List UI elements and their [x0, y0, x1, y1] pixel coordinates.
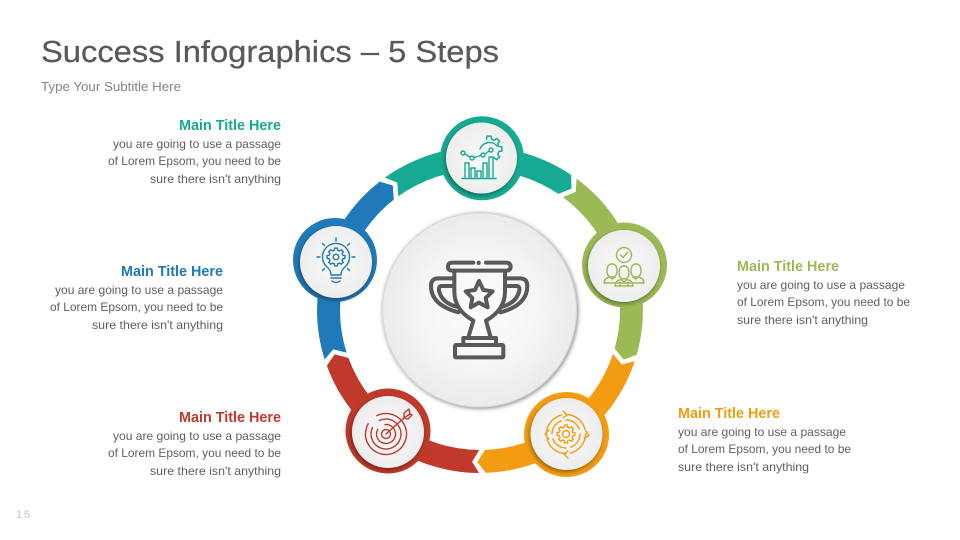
- text block: teal: sure there isn't anything: [150, 172, 281, 186]
- text block: orange: of Lorem Epsom, you need to be: [678, 442, 851, 456]
- icon: gear with circular arrows: [545, 411, 589, 458]
- text block: teal: Main Title Here: [179, 117, 281, 134]
- text block: orange: sure there isn't anything: [678, 460, 809, 474]
- arrow segment: red: [310, 348, 490, 498]
- text block: blue: Main Title Here: [121, 263, 223, 280]
- icon: trophy: [431, 263, 527, 357]
- node: orange: [524, 392, 609, 477]
- title: Success Infographics – 5 Steps: [41, 34, 499, 69]
- arrow segment: orange: [473, 346, 653, 496]
- ring of five arrow segments: [296, 147, 663, 498]
- node: red: [346, 388, 430, 474]
- text block: red: sure there isn't anything: [150, 464, 281, 478]
- icon: light bulb with gear: [317, 238, 355, 282]
- text block: green: Main Title Here: [737, 258, 839, 275]
- text block: teal: [108, 117, 281, 186]
- text block: green: of Lorem Epsom, you need to be: [737, 295, 910, 309]
- text block: orange: [678, 405, 851, 474]
- text block: red: [108, 409, 281, 478]
- icon: team with check mark: [604, 248, 644, 286]
- arrow segment: green: [559, 169, 663, 362]
- text block: orange: Main Title Here: [678, 405, 780, 422]
- text block: green: you are going to use a passage: [737, 278, 905, 292]
- node: green: [582, 222, 667, 308]
- arrow segment: teal: [385, 147, 572, 196]
- text block: green: sure there isn't anything: [737, 313, 868, 327]
- text block: orange: you are going to use a passage: [678, 425, 846, 439]
- text block: teal: you are going to use a passage: [113, 137, 281, 151]
- node: blue: [293, 218, 377, 302]
- text block: blue: of Lorem Epsom, you need to be: [50, 300, 223, 314]
- page number: 15: [16, 509, 30, 521]
- text block: green: [737, 258, 910, 327]
- arrow segment: blue: [296, 173, 400, 365]
- text block: blue: you are going to use a passage: [55, 283, 223, 297]
- text block: red: of Lorem Epsom, you need to be: [108, 446, 281, 460]
- text block: red: you are going to use a passage: [113, 429, 281, 443]
- text block: teal: of Lorem Epsom, you need to be: [108, 154, 281, 168]
- node: teal: [440, 116, 524, 200]
- icon: growth chart with gear: [461, 136, 502, 178]
- subtitle: Type Your Subtitle Here: [41, 80, 181, 94]
- icon: target with dart: [360, 408, 412, 460]
- text block: blue: [50, 263, 223, 332]
- center disc: [382, 213, 576, 407]
- text block: blue: sure there isn't anything: [92, 318, 223, 332]
- text block: red: Main Title Here: [179, 409, 281, 426]
